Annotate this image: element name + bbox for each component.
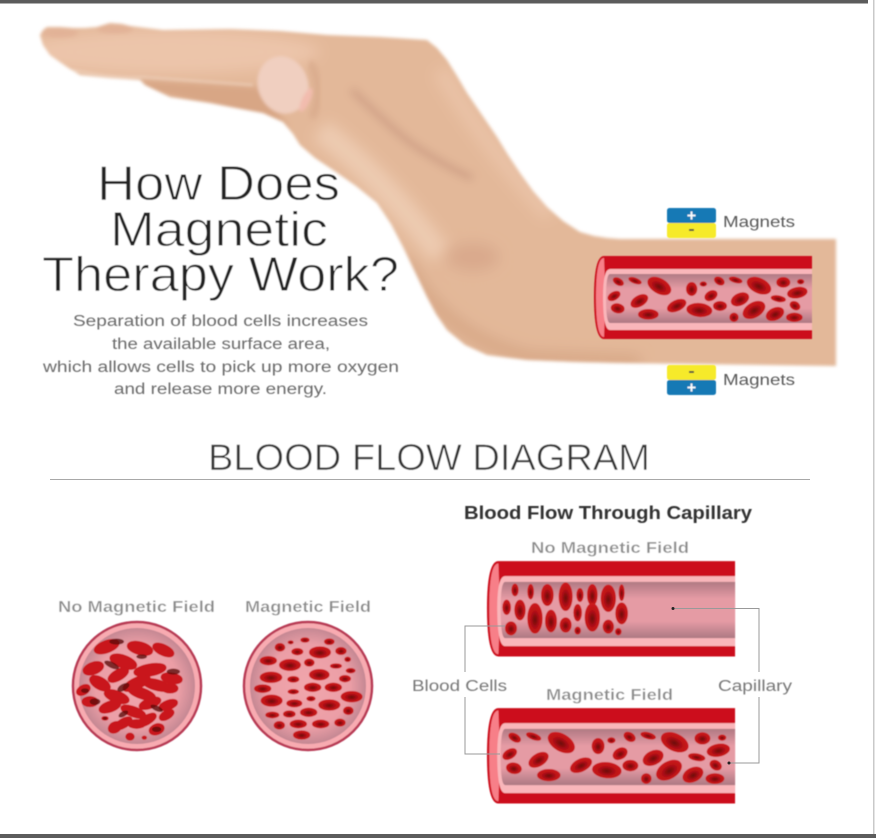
capillary heading: Blood Flow Through Capillary [464,503,752,523]
top magnet label: Magnets [723,214,795,231]
right circle label: Magnetic Field [245,599,371,616]
capillary: no magnetic field [487,561,735,657]
top magnet [667,208,716,238]
left circle label: No Magnetic Field [58,599,215,616]
capillary label: no magnetic field: No Magnetic Field [531,540,689,557]
description: which allows cells to pick up more oxygen [42,359,399,376]
section rule [50,479,810,480]
title: Therapy Work? [42,248,399,302]
bottom magnet [667,365,716,395]
capillary label: Capillary [718,678,792,695]
description: the available surface area, [112,336,330,353]
blood cells label: Blood Cells [412,678,507,695]
capillary leader lines [672,607,759,764]
cross section: magnetic field [244,622,372,750]
capillary label: magnetic field: Magnetic Field [546,687,673,704]
title: How Does [97,157,340,211]
title: Magnetic [110,203,328,257]
description: Separation of blood cells increases [73,313,368,330]
bottom magnet label: Magnets [723,372,795,389]
section heading: BLOOD FLOW DIAGRAM [208,437,650,478]
hand illustration [20,15,840,375]
title [42,157,399,302]
description: and release more energy. [114,381,327,398]
capillary: magnetic field [487,708,735,804]
arm blood vessel [594,256,812,339]
description [42,313,399,398]
cross section: no magnetic field [73,622,201,750]
blood cells leader lines [465,626,505,754]
